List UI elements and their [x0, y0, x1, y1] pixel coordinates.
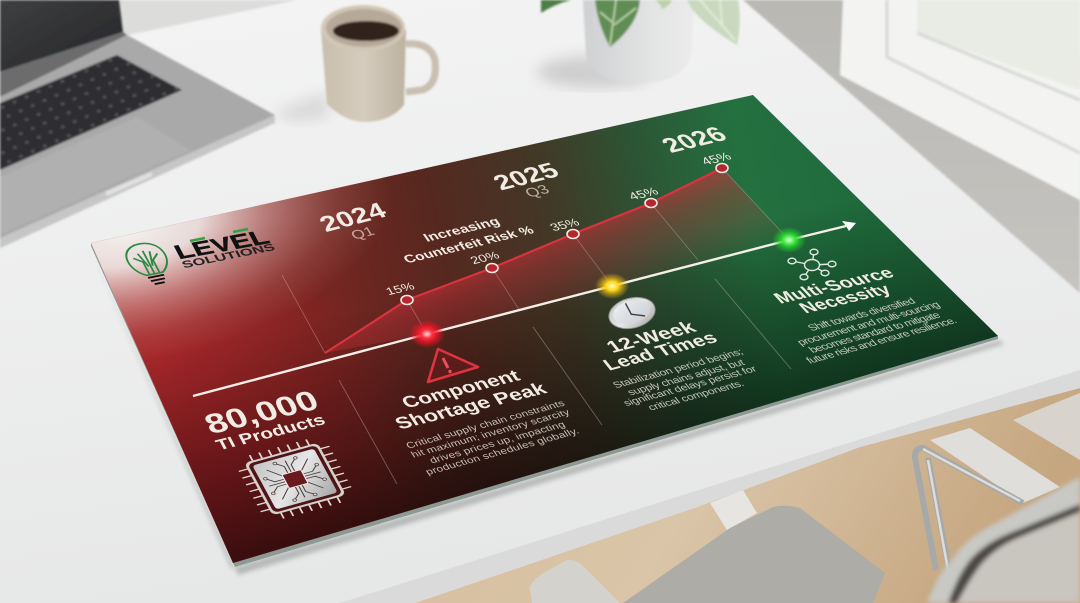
logo accent strokes: [190, 229, 248, 241]
stat: 80,000 TI Products: 80,000: [199, 385, 324, 440]
text: lead times description: critical components.: [646, 379, 747, 413]
keyboard: [0, 55, 182, 170]
column dividers: [339, 279, 791, 484]
desk legs and supports: [710, 393, 1080, 530]
heading: Component Shortage Peak: Component: [398, 367, 524, 412]
window frame and sill: [840, 0, 1080, 200]
text: multi-source description: procurement and multi-sourcing: [795, 300, 943, 348]
window frame detail: [887, 0, 1080, 153]
logo: [121, 226, 277, 287]
text: shortage description: production schedules globally.: [424, 427, 581, 477]
mug body: [321, 30, 406, 122]
chart title: Counterfeit Risk %: [401, 224, 537, 266]
stat: 80,000 TI Products: TI Products: [213, 411, 328, 454]
risk line: [325, 168, 722, 353]
markers: [401, 164, 728, 304]
risk line chart: [282, 150, 789, 353]
risk line chart: 45%: [625, 185, 662, 202]
year 2025: 2025: [487, 158, 564, 195]
laptop: [0, 0, 275, 248]
chrome chair frame: [915, 448, 1023, 574]
pot shadow: [537, 56, 653, 88]
risk line chart: 45%: [698, 150, 734, 167]
heading: 12-Week Lead Times: Lead Times: [599, 329, 722, 374]
icon: microchip: [233, 435, 357, 523]
coffee: [333, 21, 399, 41]
laptop front edge: [0, 115, 275, 248]
leaf middle: [655, 0, 672, 10]
text: lead times description: supply chains adjust, but: [625, 358, 747, 398]
heading: Multi-Source Necessity: Multi-Source: [770, 265, 899, 307]
icon: clock: [606, 293, 658, 333]
laptop notch: [105, 172, 152, 196]
desk front face: [340, 370, 1080, 603]
heading: Component Shortage Peak: Shortage Peak: [392, 379, 551, 433]
heading: Multi-Source Necessity: Necessity: [794, 280, 896, 316]
logo wordmark LEVEL: LEVEL: [170, 226, 273, 264]
text: lead times description: significant delays persist for: [621, 364, 760, 408]
quarter Q1: Q1: [348, 224, 378, 243]
text: multi-source description: Shift towards diversified: [806, 296, 918, 333]
logo wordmark SOLUTIONS: SOLUTIONS: [179, 241, 277, 271]
poster background: [91, 95, 998, 563]
potted plant: [537, 0, 740, 88]
text: shortage description: [405, 399, 581, 477]
icon: network hub: [788, 249, 836, 280]
text: multi-source description: [795, 296, 960, 366]
year 2026: 2026: [655, 122, 733, 157]
laptop screen: [0, 0, 123, 72]
chair backrest: [927, 477, 1080, 603]
leaf small dark: [541, 0, 571, 13]
heading: 12-Week Lead Times: 12-Week: [602, 318, 701, 357]
leaf pale: [687, 0, 740, 45]
milestone dot green: [772, 227, 806, 253]
gridlines: [282, 168, 789, 353]
risk line chart: 20%: [467, 249, 502, 267]
value labels: 15%: [384, 280, 417, 298]
text: multi-source description: future risks and ensure resilience.: [804, 316, 960, 366]
back wall top-left: [115, 0, 298, 40]
milestone dot yellow: [595, 273, 629, 299]
text: shortage description: hit maximum; inventory scarcity: [410, 408, 573, 460]
mug handle: [406, 44, 435, 92]
text: lead times description: Stabilization period begins;: [611, 347, 746, 390]
chair arm: [530, 560, 620, 603]
coffee mug: [275, 5, 435, 122]
poster shadow: [89, 246, 1004, 575]
panel: poster: [91, 95, 998, 567]
poster edge: [91, 243, 998, 567]
milestone dot red: [409, 320, 445, 348]
trackpad: [0, 117, 190, 235]
chair seat: [623, 506, 885, 603]
text: lead times description: [611, 347, 760, 413]
laptop hinge: [0, 32, 127, 97]
pot: [583, 0, 694, 83]
icon: warning triangle: [428, 349, 478, 382]
floor: [415, 388, 1080, 603]
risk line chart: 35%: [547, 216, 583, 233]
right wall: [743, 0, 1080, 293]
mug shadow: [275, 92, 330, 122]
quarter Q3: Q3: [522, 183, 553, 201]
chart title: Increasing: [420, 214, 503, 244]
laptop base: [0, 35, 275, 248]
window glass: [917, 0, 1080, 90]
leaf large green: [595, 0, 640, 47]
timeline arrow: [193, 221, 856, 396]
mug rim: [321, 5, 405, 51]
text: multi-source description: becomes standard to mitigate: [807, 311, 943, 355]
area under the risk line: [325, 168, 789, 353]
year 2024: 2024: [314, 198, 391, 237]
logo bulb icon: [121, 240, 178, 287]
text: shortage description: drives prices up, impacting: [428, 420, 568, 466]
text: shortage description: Critical supply chain constraints: [405, 399, 567, 451]
